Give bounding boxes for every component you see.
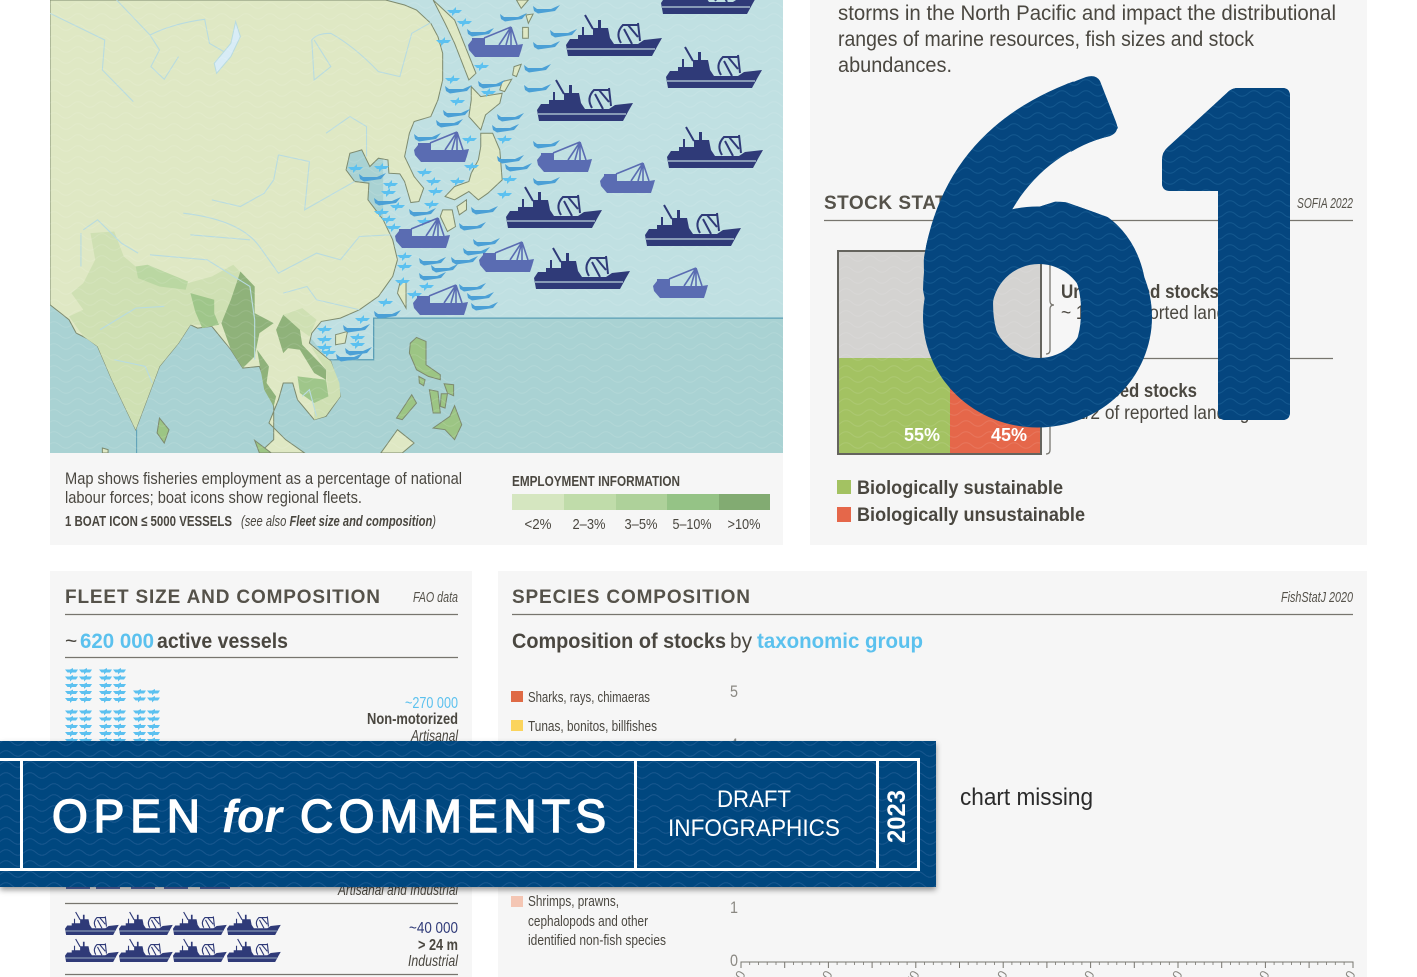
total vessels: 620 000: [80, 630, 154, 653]
legend: taxonomic groups: Shrimps, prawns,: [528, 893, 619, 910]
legend: taxonomic groups: Tunas, bonitos, billfishes: [528, 718, 657, 735]
banner title: [52, 790, 606, 842]
page number 61: [923, 76, 1290, 428]
legend: employment information: 5–10%: [672, 516, 712, 533]
legend: employment information: 2–3%: [572, 516, 606, 533]
heading: species composition: FishStatJ 2020: [1281, 589, 1353, 606]
chart axis: [721, 682, 1359, 977]
legend: employment information: <2%: [524, 516, 552, 533]
page number 61: 1: [1109, 0, 1375, 522]
label: unassessed stocks: [1061, 282, 1258, 324]
chart subtitle: [512, 630, 923, 653]
label: assessed stocks: ~ 1/2 of reported landings: [1061, 403, 1258, 424]
label: non-motorized: Artisanal: [410, 728, 458, 745]
chart axis: 1: [730, 898, 738, 917]
icons: non-motorized boats: [65, 668, 160, 744]
total vessels: [65, 630, 458, 658]
intro text: [838, 2, 1336, 77]
icons: large trawlers: [506, 0, 763, 289]
label: unassessed stocks: ~ 1/2 of reported landings: [1061, 303, 1258, 324]
label: artisanal and industrial: Artisanal and Industrial: [337, 882, 458, 899]
intro text: storms in the North Pacific and impact the distributional: [838, 2, 1336, 25]
legend: employment information: EMPLOYMENT INFORMATION: [512, 473, 680, 490]
total vessels: ~: [65, 630, 77, 653]
chart subtitle: taxonomic group: [757, 630, 923, 653]
banner: open for comments: [0, 741, 936, 887]
map caption: [65, 469, 462, 530]
map caption: 1 BOAT ICON ≤ 5000 VESSELS: [65, 513, 232, 530]
label: industrial: ~40 000: [409, 920, 458, 937]
banner title: OPEN: [52, 790, 200, 842]
panel: stock status: [810, 0, 1367, 545]
chart axis: 0: [730, 951, 738, 970]
stacked chart: 45%: [991, 425, 1027, 445]
heading: species composition: [512, 587, 1353, 614]
map caption: (see also Fleet size and composition): [241, 513, 436, 530]
banner subtitle: INFOGRAPHICS: [668, 815, 840, 842]
legend: employment information: [512, 473, 770, 533]
label: non-motorized: ~270 000: [405, 695, 458, 712]
legend: sustainability: Biologically sustainable: [857, 478, 1063, 499]
heading: fleet size: FLEET SIZE AND COMPOSITION: [65, 587, 380, 608]
chart axis: 5: [730, 682, 738, 701]
heading: stock status: [824, 193, 1353, 220]
heading: fleet size: [65, 587, 458, 614]
stacked chart: 55%: [904, 425, 940, 445]
label: assessed stocks: Assessed stocks: [1061, 381, 1197, 402]
panel: map: [50, 0, 783, 545]
label: industrial: Industrial: [408, 953, 458, 970]
legend: taxonomic groups: [511, 689, 666, 949]
banner title: for: [222, 790, 284, 842]
legend: taxonomic groups: Sharks, rays, chimaeras: [528, 689, 650, 706]
chart subtitle: by: [730, 630, 752, 653]
panel: fleet size and composition: [50, 571, 472, 977]
stacked chart: [838, 251, 1041, 454]
intro text: abundances.: [838, 54, 952, 77]
label: industrial: [408, 920, 458, 970]
total vessels: active vessels: [157, 630, 288, 653]
banner subtitle: [668, 786, 840, 842]
icons: small light boats: [317, 7, 517, 357]
chart missing note: chart missing: [960, 784, 1093, 811]
legend: employment information: 3–5%: [624, 516, 658, 533]
icons: medium boats: [395, 27, 708, 315]
chart subtitle: Composition of stocks: [512, 630, 726, 653]
label: industrial: > 24 m: [418, 937, 458, 954]
banner subtitle: DRAFT: [717, 786, 791, 813]
label: non-motorized: [367, 695, 458, 745]
banner title: COMMENTS: [300, 790, 606, 842]
label: non-motorized: Non-motorized: [367, 711, 458, 728]
icons: small dark boats: [336, 5, 577, 362]
heading: stock status: STOCK STATUS: [824, 193, 974, 214]
map caption: labour forces; boat icons show regional fleets.: [65, 488, 362, 507]
heading: fleet size: FAO data: [413, 589, 458, 606]
icons: partly hidden boats: [66, 887, 230, 889]
intro text: ranges of marine resources, fish sizes and stock: [838, 28, 1254, 51]
legend: taxonomic groups: identified non-fish species: [528, 932, 666, 949]
heading: species composition: SPECIES COMPOSITION: [512, 587, 750, 608]
legend: employment information: >10%: [728, 516, 760, 533]
panel: species composition: [498, 571, 1367, 977]
icons: industrial trawlers: [65, 912, 281, 962]
banner year: 2023: [883, 790, 911, 843]
brackets: [1046, 251, 1054, 454]
heading: stock status: SOFIA 2022: [1297, 195, 1353, 212]
legend: taxonomic groups: cephalopods and other: [528, 913, 648, 930]
legend: sustainability: Biologically unsustainable: [857, 505, 1085, 526]
map of East and South Asia: [50, 0, 783, 453]
chart axis: 4: [730, 735, 738, 754]
label: unassessed stocks: Unassessed stocks: [1061, 282, 1219, 303]
legend: sustainability: [837, 478, 1085, 526]
map caption: Map shows fisheries employment as a percentage of national: [65, 469, 462, 488]
label: assessed stocks: [1061, 381, 1258, 424]
